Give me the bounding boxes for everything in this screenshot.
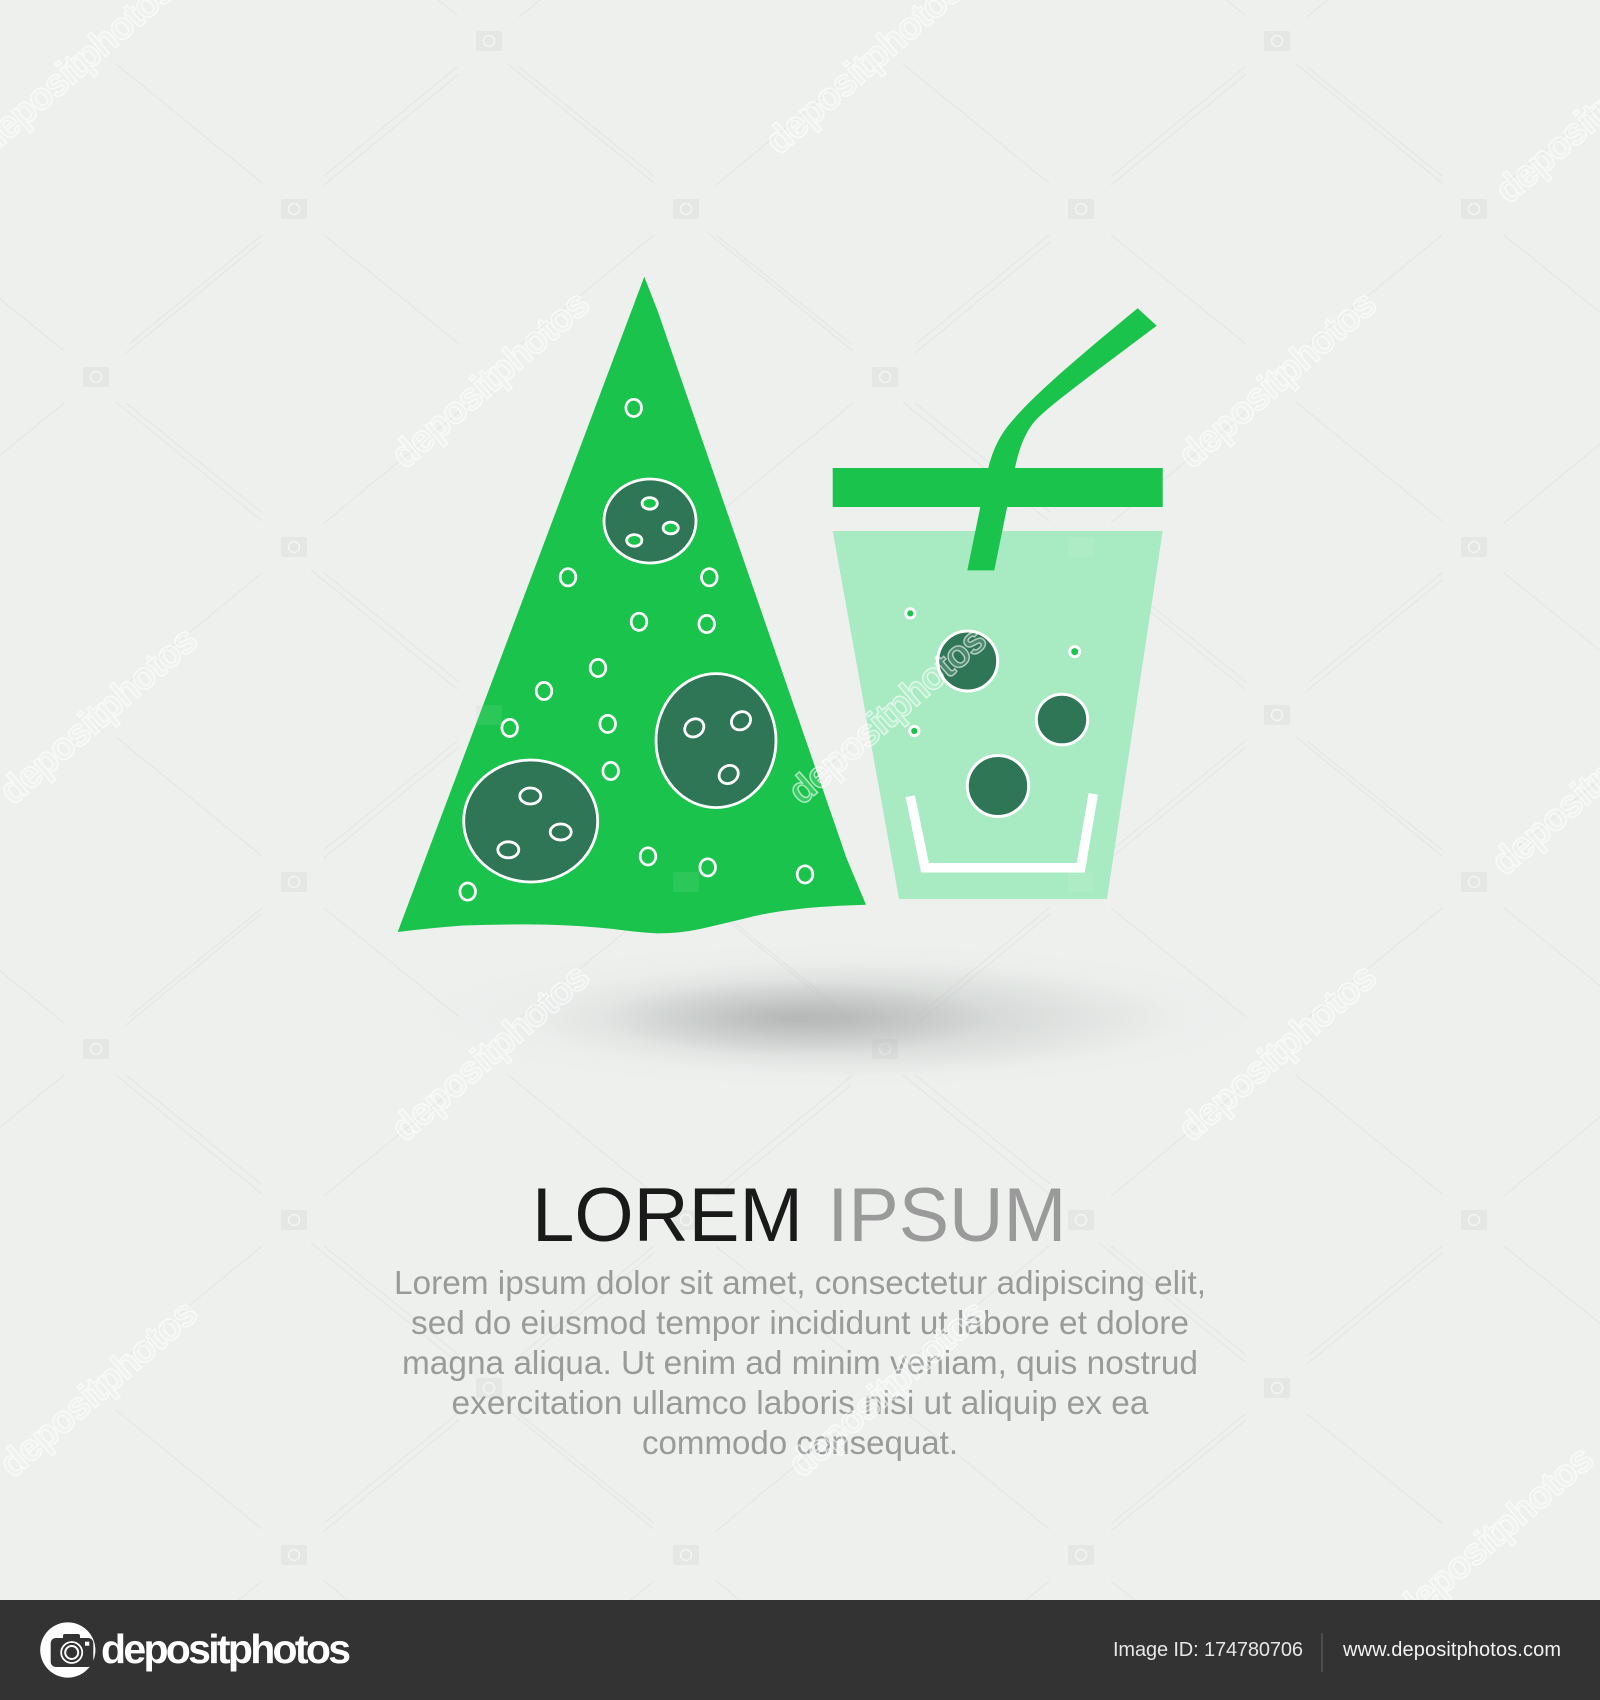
cup body — [833, 531, 1163, 899]
pepperoni: top — [604, 479, 696, 563]
drop shadow under the icons — [390, 938, 1290, 1094]
icon: pizza slice — [398, 277, 866, 933]
logo wordmark: depositphotos — [101, 1626, 351, 1672]
watermark wordmarks: depositphotos — [383, 283, 598, 477]
small bubbles — [906, 609, 1080, 736]
large bubbles — [938, 631, 1088, 816]
straw — [967, 308, 1157, 570]
cup lid — [833, 468, 1163, 507]
body text: exercitation ullamco laboris nisi ut aliquip ex ea — [452, 1384, 1149, 1421]
watermark wordmarks: depositphotos — [383, 956, 598, 1150]
watermark marks over the icons — [476, 537, 1094, 892]
icon: depositphotos camera logo — [40, 1622, 95, 1678]
pizza crust and body — [398, 277, 866, 933]
pepperoni: left — [464, 760, 598, 882]
watermark wordmarks: depositphotos — [1170, 283, 1385, 477]
footer divider — [1322, 1633, 1323, 1672]
body text — [394, 1264, 1206, 1461]
icon: drink cup with straw — [833, 308, 1163, 899]
white inner glass line — [910, 794, 1093, 868]
pepperoni: right — [656, 674, 776, 808]
footer bar — [0, 1600, 1600, 1700]
watermark wordmarks: depositphotos — [780, 1292, 995, 1486]
title — [532, 1173, 1066, 1258]
watermark wordmarks: depositphotos — [1387, 1438, 1600, 1632]
body text: commodo consequat. — [642, 1424, 958, 1461]
body text: Lorem ipsum dolor sit amet, consectetur adipiscing elit, — [394, 1264, 1206, 1301]
watermark wordmarks: depositphotos — [1170, 956, 1385, 1150]
title: LOREM — [532, 1173, 803, 1258]
image id: Image ID: 174780706 — [1113, 1639, 1303, 1661]
body text: magna aliqua. Ut enim ad minim veniam, quis nostrud — [402, 1344, 1198, 1381]
small toppings — [460, 399, 813, 900]
title: IPSUM — [827, 1173, 1066, 1258]
body text: sed do eiusmod tempor incididunt ut labore et dolore — [411, 1304, 1189, 1341]
website url: www.depositphotos.com — [1342, 1639, 1561, 1661]
watermark wordmarks: depositphotos — [780, 619, 995, 813]
